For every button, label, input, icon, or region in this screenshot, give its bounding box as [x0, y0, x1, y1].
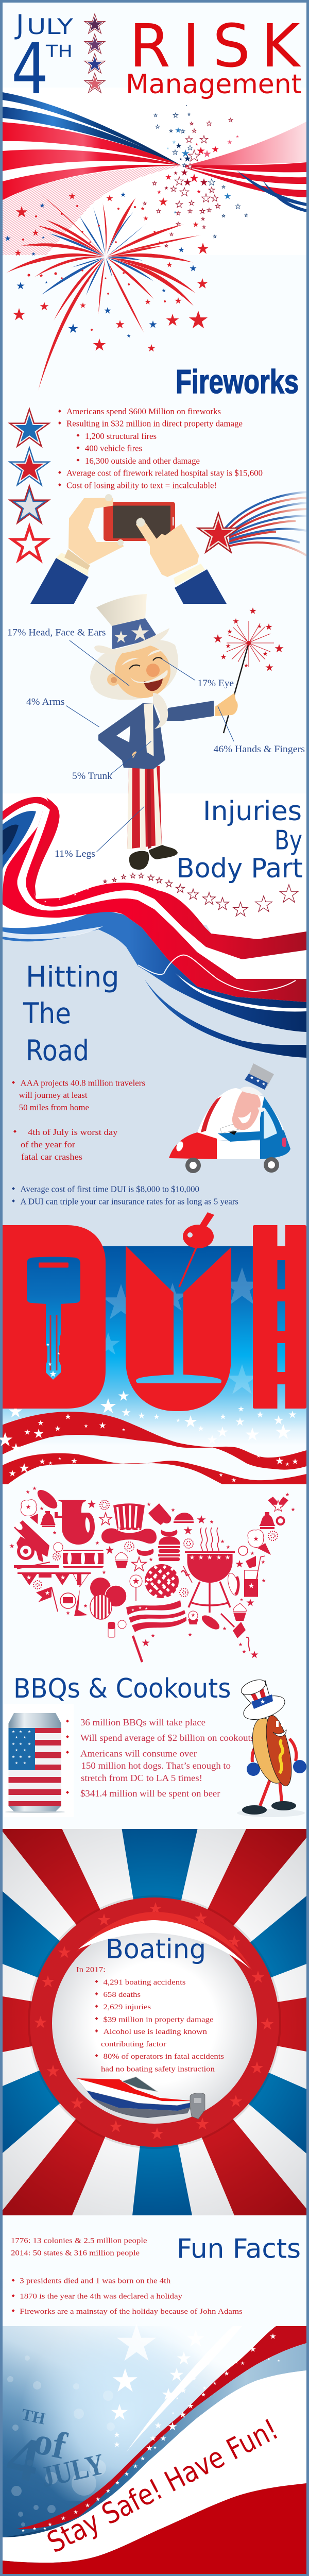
text: fireworks bullets	[58, 406, 263, 490]
panel: DUI	[0, 1212, 306, 1484]
phone	[104, 502, 175, 541]
ribbon white band	[18, 804, 306, 979]
heading: Hitting The Road	[23, 960, 119, 1067]
eyes	[129, 657, 162, 669]
panel: fun facts	[11, 2234, 301, 2316]
icon: grill	[185, 1528, 235, 1613]
decoration: hatched ribbon left	[3, 166, 181, 255]
icon: pickle and hot dog	[226, 1572, 241, 1597]
title: July 4th: ULY	[27, 14, 73, 39]
icon: star with streaming ribbons	[196, 492, 306, 555]
icon: bell	[40, 1511, 56, 1527]
panel: hitting the road	[12, 960, 290, 1207]
text: travel bullets: will journey at least	[19, 1090, 88, 1100]
text: fun fact bullets: 3 presidents died and 1 was born on the 4th	[20, 2277, 171, 2285]
pants	[127, 766, 162, 849]
text: body part labels: 11% Legs	[55, 849, 95, 859]
white swoosh line	[138, 955, 296, 991]
decoration: white stars	[9, 1391, 297, 1444]
heading: Injuries By Body Part: By	[274, 825, 302, 856]
icon: flag	[126, 1600, 186, 1662]
jacket	[98, 703, 165, 769]
text: BBQ bullets: Will spend average of $2 billion on cookouts	[80, 1733, 254, 1743]
icon: flag beer can	[4, 1704, 74, 1817]
text: travel bullets: fatal car crashes	[21, 1152, 82, 1162]
text: 4th of July distressed logo	[2, 2405, 108, 2495]
text: DUI bullets	[12, 1184, 238, 1207]
icon: Uncle Sam driving car	[169, 1063, 290, 1173]
text: boating stats: $39 million in property damage	[103, 2015, 214, 2024]
text: body part labels: 5% Trunk	[72, 771, 113, 782]
text: boating stats: 658 deaths	[103, 1991, 141, 1999]
text: 4th of July distressed logo: TH	[20, 2405, 47, 2428]
icon: Uncle Sam	[90, 594, 238, 870]
text: fireworks bullets: 1,200 structural fires	[85, 431, 157, 441]
icon: letter U with martini glass	[126, 1212, 231, 1411]
icon: stars and sparkles	[9, 1486, 295, 1658]
text: 4th of July distressed logo: of	[30, 2419, 71, 2468]
text: boating stats: had no boating safety instruction	[101, 2065, 215, 2073]
decoration: red star waves	[0, 1412, 306, 1484]
text: DUI bullets: A DUI can triple your car insurance rates for as long as 5 years	[20, 1197, 238, 1207]
text: fireworks bullets: 16,300 outside and other damage	[85, 456, 200, 466]
heading: Hitting The Road: Hitting	[26, 960, 119, 993]
icon: bunting	[18, 1572, 91, 1587]
text: boating stats: contributing factor	[101, 2040, 166, 2048]
text: body part labels: 4% Arms	[26, 697, 65, 707]
text: boating stats: Alcohol use is leading known	[103, 2028, 208, 2036]
decoration: sunburst background	[3, 1829, 306, 2215]
icon: firecracker	[268, 1497, 288, 1512]
icon: letter I with road	[253, 1225, 306, 1409]
title: July 4th	[11, 9, 73, 110]
eyebrows	[122, 650, 163, 666]
title: July 4th: J	[14, 9, 24, 41]
heading: Injuries By Body Part	[176, 796, 303, 884]
decoration: blue sky	[3, 2326, 306, 2574]
beard	[153, 693, 168, 729]
text: boating stats: 80% of operators in fatal accidents	[103, 2053, 224, 2061]
heading: Boating: Boating	[106, 1934, 206, 1965]
heading: Injuries By Body Part: Injuries	[203, 796, 302, 827]
ribbon loop blue	[3, 811, 36, 871]
ribbon lower blue band	[145, 979, 306, 1058]
left hand	[30, 558, 89, 604]
right hand	[175, 569, 227, 604]
panel: closing banner	[2, 2324, 306, 2574]
icon: lollipop	[130, 1575, 142, 1601]
backdrop gradient	[3, 1246, 306, 1445]
panel: hitting the road background	[3, 925, 306, 1247]
text: fun fact bullets: Fireworks are a mainstay of the holiday because of John Adams	[20, 2308, 243, 2316]
icon: pie	[145, 1564, 181, 1599]
decoration: firework	[5, 192, 209, 393]
text: fireworks bullets: Average cost of firework related hospital stay is $15,600	[66, 468, 263, 478]
icon: burgers and hot dog	[137, 1513, 194, 1561]
decoration: ribbon stars	[22, 2333, 280, 2532]
text: 4th of July distressed logo: JULY	[38, 2447, 108, 2494]
heading: Hitting The Road: The	[23, 997, 71, 1030]
text: boating stats: In 2017:	[76, 1966, 106, 1974]
heading: Injuries By Body Part: Body Part	[176, 853, 303, 884]
panel: USA icon map	[9, 1486, 295, 1662]
icon: stopwatch	[238, 1546, 248, 1555]
icon: oven mitt	[148, 1503, 171, 1525]
panel: injuries by body part	[3, 594, 306, 927]
driver hat	[247, 1063, 274, 1087]
ribbon lower red band	[3, 805, 306, 1002]
decoration: red ribbon	[16, 2326, 306, 2529]
text: BBQ bullets: $341.4 million will be spent on beer	[80, 1788, 220, 1799]
text: BBQ bullets: Americans will consume over	[80, 1749, 197, 1759]
icon: fireworks sparkles	[33, 1500, 278, 1597]
driver head	[232, 1089, 261, 1130]
chart: body part leader lines	[66, 640, 234, 852]
icon: bell and cog	[259, 1512, 284, 1529]
text: boating stats: 2,629 injuries	[103, 2003, 151, 2011]
panel: header	[3, 9, 306, 393]
text: travel bullets: of the year for	[21, 1140, 76, 1149]
decoration: star burst	[143, 105, 248, 247]
ribbon thin strand	[33, 798, 60, 897]
body	[169, 1132, 217, 1159]
text: body part labels: 46% Hands & Fingers	[213, 744, 305, 755]
icon: speedboat	[76, 2077, 205, 2119]
decoration: red band	[3, 2483, 306, 2574]
icon: hands holding smartphone	[30, 494, 227, 604]
text: body part labels	[7, 628, 305, 859]
icon: football	[35, 1487, 60, 1512]
small stars along ribbon	[33, 884, 96, 903]
decoration: flag ribbons left	[3, 92, 181, 200]
outlined star arc	[104, 873, 298, 916]
text: fireworks bullets: Cost of losing ability to text = incalculable!	[66, 480, 217, 490]
panel: fireworks	[8, 363, 306, 604]
icon: cotton candy	[21, 1500, 38, 1524]
text: boating stats: 4,291 boating accidents	[103, 1978, 186, 1987]
text: body part labels: 17% Head, Face & Ears	[7, 628, 106, 638]
text: travel bullets: 50 miles from home	[19, 1103, 89, 1112]
icon: spatula	[221, 1614, 246, 1638]
decoration: blue band	[3, 2343, 306, 2537]
text: fun fact bullets: 1870 is the year the 4th was declared a holiday	[20, 2293, 183, 2301]
icon: hot dog mascot	[237, 1677, 306, 1817]
decoration: bokeh lights	[7, 2355, 115, 2527]
icon: cannon	[13, 1520, 49, 1562]
title: July 4th: 4	[11, 29, 48, 110]
icon: tuba	[55, 1500, 95, 1545]
panel: boating	[3, 1829, 306, 2215]
text: body part labels: 17% Eye	[198, 678, 234, 689]
text: BBQ bullets: 150 million hot dogs. That’s enough to	[81, 1760, 231, 1771]
decoration: large white stars	[111, 2324, 210, 2447]
cabin	[197, 1088, 284, 1141]
decoration: flag ribbons right	[181, 122, 306, 212]
icon: flag stars column	[84, 14, 105, 93]
hat	[96, 594, 147, 626]
text: DUI bullets: Average cost of first time DUI is $8,000 to $10,000	[20, 1184, 199, 1194]
face	[115, 645, 170, 698]
hair	[90, 640, 178, 700]
icon: drumsticks	[14, 1562, 58, 1569]
ribbon white upper	[205, 922, 306, 939]
text: population comparison: 1776: 13 colonies & 2.5 million people	[11, 2237, 147, 2245]
ribbon upper red band	[26, 804, 306, 959]
icon: cupcakes	[188, 1603, 246, 1624]
icon: baseball	[54, 1543, 63, 1552]
driver jacket	[218, 1131, 260, 1142]
text: fun fact bullets	[12, 2277, 243, 2316]
text: population comparison: 2014: 50 states & 316 million people	[11, 2249, 140, 2258]
icon: top hat	[101, 1503, 157, 1544]
icon: sparkler	[213, 607, 284, 733]
icon: letter D with key	[3, 1225, 106, 1409]
icon: pennant	[36, 1587, 58, 1612]
hand	[215, 693, 238, 716]
text: BBQ bullets: 36 million BBQs will take place	[80, 1717, 205, 1727]
decoration: white band	[3, 2370, 306, 2563]
ribbon loop top	[3, 797, 52, 820]
icon: four patriotic stars	[8, 407, 51, 564]
title: Management: Management	[126, 69, 302, 100]
mustache and mouth	[144, 678, 163, 691]
icon: soda glass	[244, 1556, 265, 1597]
decoration: star ring	[28, 1895, 281, 2149]
text: travel bullets: AAA projects 40.8 million travelers	[20, 1078, 145, 1088]
panel: BBQs and cookouts	[4, 1673, 306, 1817]
text: 4th of July distressed logo: 4	[2, 2421, 46, 2495]
text: population comparison	[11, 2237, 147, 2258]
icon: drum	[62, 1550, 105, 1568]
icon: second football	[199, 1613, 222, 1632]
decoration: white swoosh	[126, 2326, 242, 2452]
text: BBQ bullets: stretch from DC to LA 5 times!	[81, 1773, 202, 1783]
text: fireworks bullets: Americans spend $600 Million on fireworks	[66, 406, 221, 416]
decoration: faint stars	[57, 1262, 262, 1394]
icon: second cotton candy	[248, 1530, 271, 1555]
text: travel bullets: 4th of July is worst day	[28, 1127, 118, 1137]
text: BBQ bullets	[66, 1717, 254, 1799]
icon: balloons	[90, 1578, 127, 1619]
heading: Fun Facts: Fun Facts	[177, 2234, 301, 2265]
title: July 4th: TH	[45, 41, 73, 61]
decoration: swirling flag ribbon	[3, 797, 306, 1058]
icon: match and bottle	[108, 1566, 250, 1651]
wheels	[185, 1158, 201, 1173]
heading: Hitting The Road: Road	[26, 1034, 89, 1067]
ribbon navy band	[3, 911, 306, 1032]
heading: BBQs & Cookouts: BBQs & Cookouts	[13, 1673, 231, 1704]
title: Risk: RISK	[129, 12, 301, 81]
icon: french horn	[60, 1589, 88, 1616]
ribbon white band under red	[3, 902, 124, 928]
icon: cupcake	[115, 1552, 128, 1568]
text: boating stats	[76, 1966, 224, 2073]
text: fireworks bullets: 400 vehicle fires	[85, 444, 142, 453]
shoes	[129, 851, 149, 870]
text: fireworks bullets: Resulting in $32 million in direct property damage	[66, 418, 243, 429]
icon: outlined stars	[99, 1513, 146, 1571]
text: travel bullets	[12, 1078, 145, 1162]
